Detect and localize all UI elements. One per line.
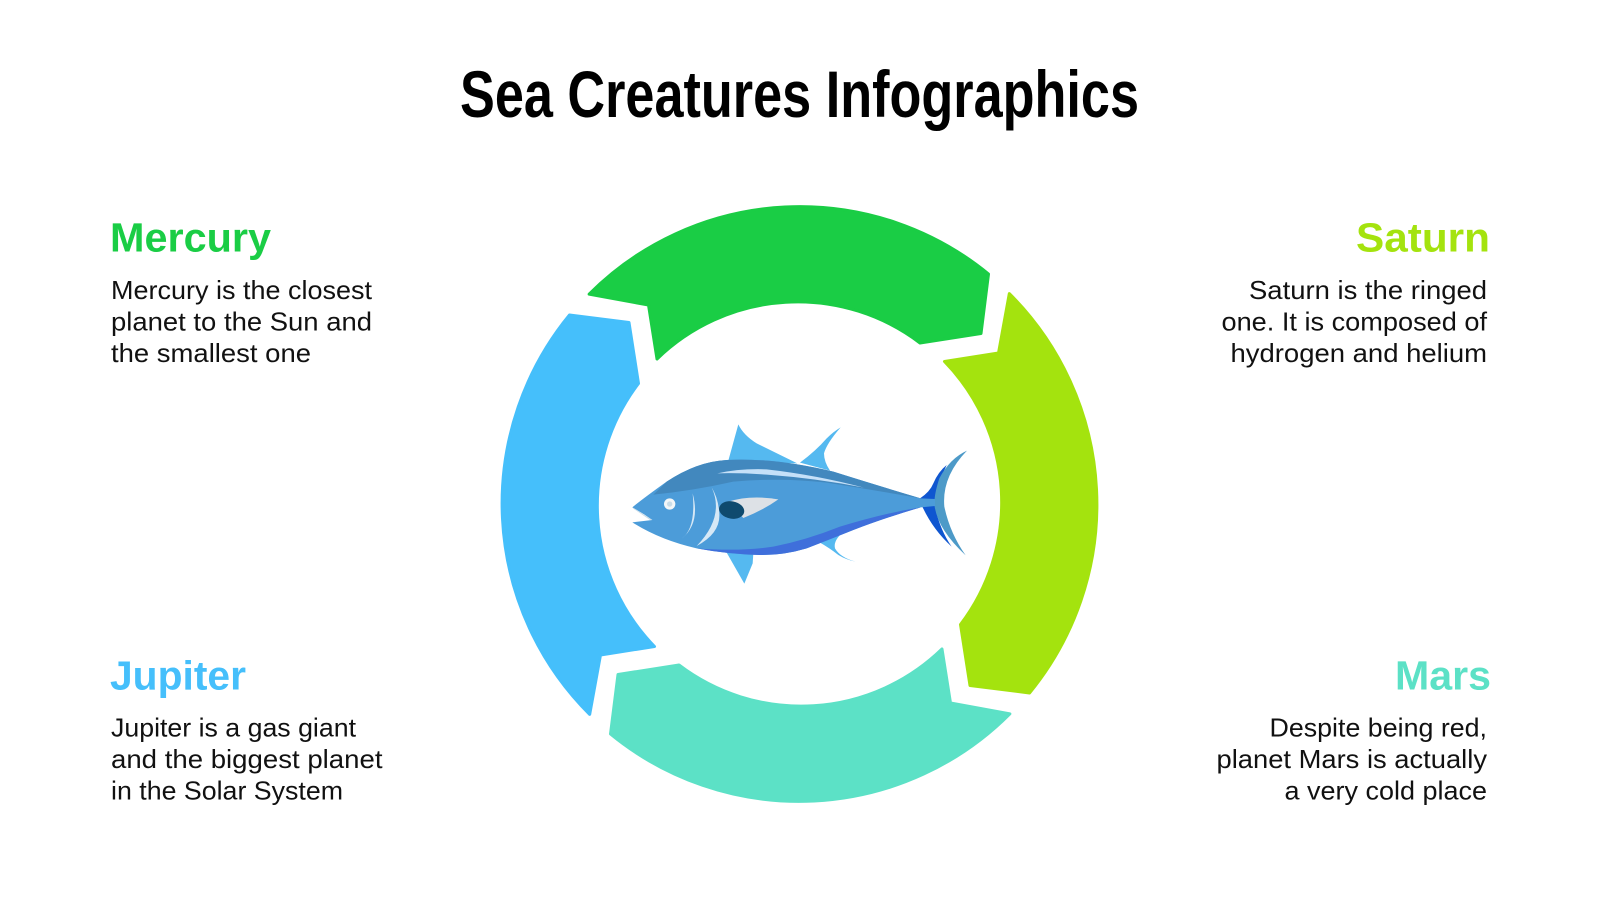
panel: Saturn — [1222, 214, 1490, 368]
text: Mercury description: the smallest one — [111, 338, 311, 368]
arrow: green, Mercury — [589, 207, 988, 359]
tail light part — [934, 451, 967, 555]
first dorsal fin — [728, 424, 797, 463]
text: Mercury description: Mercury is the closest — [111, 275, 373, 305]
mouth lip — [632, 507, 652, 520]
heading: Jupiter: Jupiter — [110, 652, 246, 698]
text: Jupiter description: in the Solar System — [111, 776, 343, 806]
belly stripe — [697, 507, 921, 555]
text: Jupiter description: Jupiter is a gas giant — [111, 712, 357, 742]
title: Sea Creatures Infographics — [460, 57, 1139, 131]
text: Jupiter description — [111, 712, 383, 806]
eye — [664, 498, 675, 510]
heading: Mercury: Mercury — [110, 214, 271, 260]
icon: tuna fish — [632, 424, 967, 584]
arrow: lime, Saturn — [944, 294, 1097, 693]
gill lines — [682, 493, 695, 539]
anal fin — [818, 534, 856, 562]
text: Mercury description — [111, 275, 373, 368]
pectoral dark spot — [718, 499, 746, 521]
second dorsal fin — [800, 427, 841, 471]
back highlight — [717, 469, 864, 488]
heading: Mars: Mars — [1395, 652, 1491, 698]
text: Saturn description — [1222, 275, 1488, 368]
text: Mars description: a very cold place — [1284, 776, 1487, 806]
text: Mars description: planet Mars is actually — [1216, 744, 1487, 774]
arrow: blue, Jupiter — [502, 315, 654, 714]
text: Saturn description: hydrogen and helium — [1230, 338, 1487, 368]
text: Jupiter description: and the biggest planet — [111, 744, 383, 774]
text: Mars description: Despite being red, — [1270, 712, 1487, 742]
back band — [653, 460, 921, 498]
lower fin — [727, 553, 753, 584]
tail dark part — [920, 465, 952, 547]
panel: Mercury — [110, 214, 373, 368]
cycle ring of four arrows — [502, 207, 1097, 801]
pectoral fin — [728, 497, 778, 518]
text: Mars description — [1216, 712, 1487, 806]
text: Saturn description: one. It is composed of — [1222, 306, 1488, 336]
arrow: teal, Mars — [610, 649, 1010, 801]
panel: Jupiter — [110, 652, 383, 806]
panel: Mars — [1216, 652, 1491, 806]
text: Saturn description: Saturn is the ringed — [1249, 275, 1487, 305]
text: Mercury description: planet to the Sun and — [111, 306, 372, 336]
heading: Saturn: Saturn — [1356, 214, 1490, 260]
body — [632, 460, 935, 555]
